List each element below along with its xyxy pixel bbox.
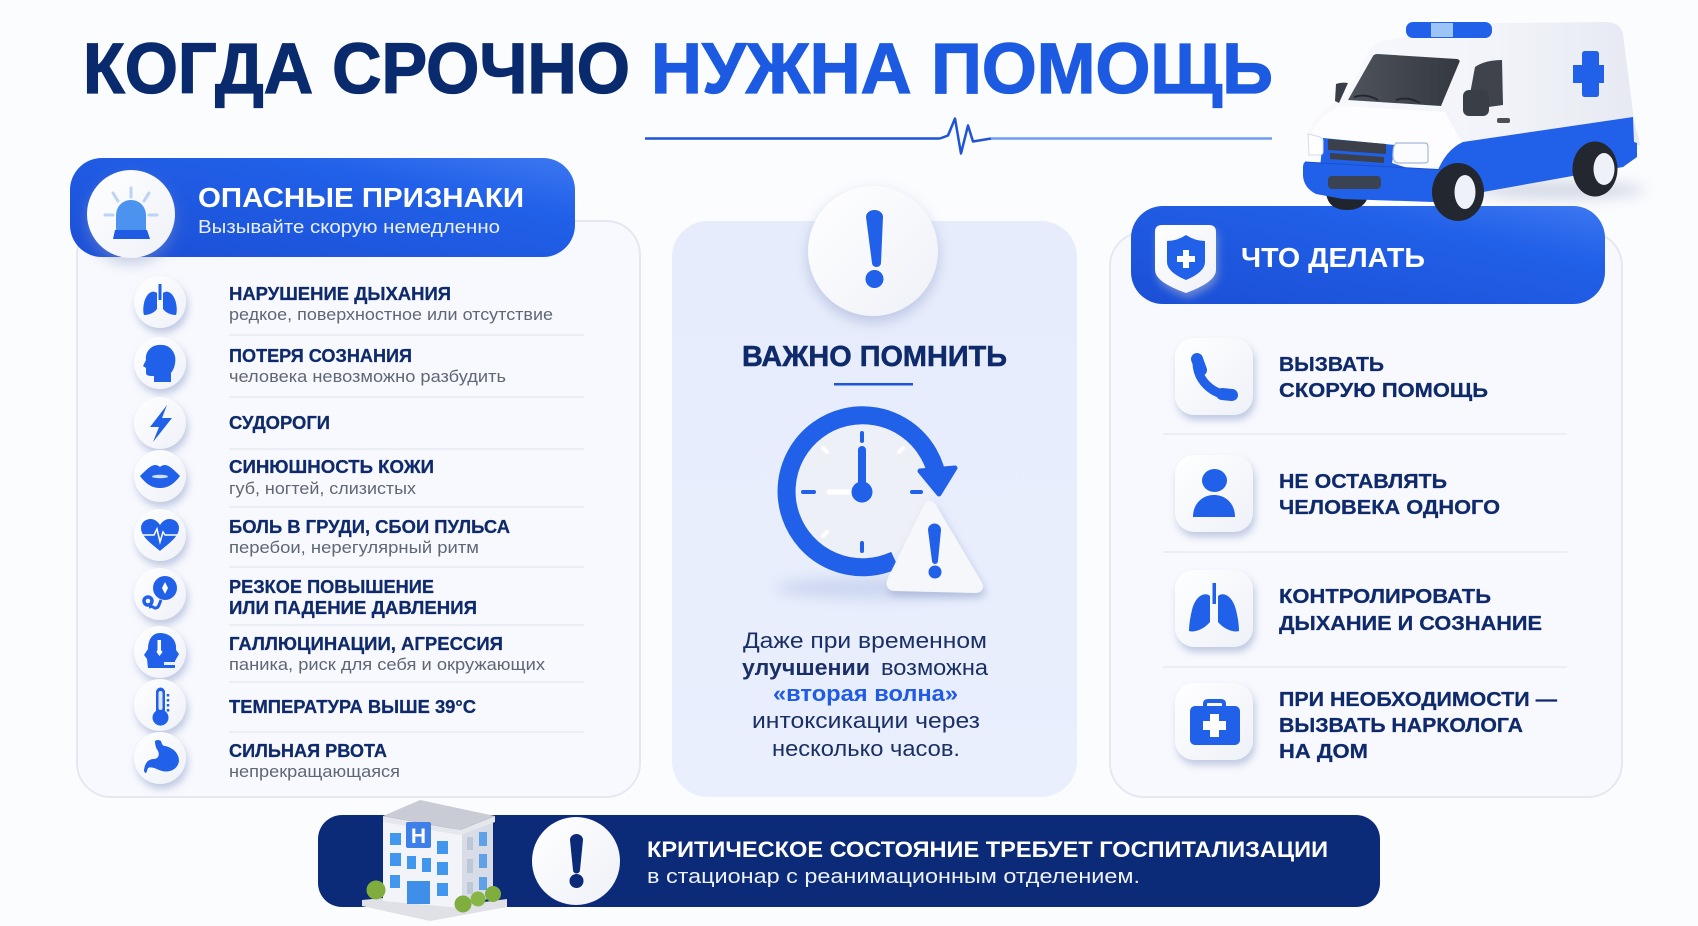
row: consciousness: ПОТЕРЯ СОЗНАНИЯ: [229, 346, 412, 366]
title: КОГДА СРОЧНО: [83, 30, 630, 109]
step: monitor breathing: [1175, 570, 1542, 647]
far front wheel: [1326, 193, 1369, 210]
front-right wheel: [1432, 163, 1484, 221]
step: call ambulance: СКОРУЮ ПОМОЩЬ: [1279, 380, 1488, 402]
headlights: [1393, 143, 1428, 163]
header pill: [70, 158, 575, 257]
row: breathing: редкое, поверхностное или отсутствие: [229, 306, 553, 324]
row: vomiting: [134, 732, 400, 784]
header pill: Вызывайте скорую немедленно: [198, 216, 500, 237]
door handle: [1497, 118, 1510, 123]
step: call narcologist: [1175, 683, 1557, 763]
hood highlight: [1312, 106, 1462, 170]
panel background: [77, 221, 640, 797]
title: НУЖНА ПОМОЩЬ: [651, 30, 1273, 109]
row: chest pain: [134, 509, 510, 561]
grille: [1328, 139, 1386, 163]
hospital sign: [406, 822, 431, 848]
left mirror: [1335, 83, 1348, 103]
step: call narcologist: ВЫЗВАТЬ НАРКОЛОГА: [1279, 715, 1523, 737]
icon: hospital building: H: [411, 825, 426, 848]
windows: [390, 833, 448, 896]
header pill: ЧТО ДЕЛАТЬ: [1241, 242, 1425, 273]
bushes: [366, 880, 386, 900]
row: seizures: [134, 397, 330, 449]
heartbeat divider: [645, 118, 1272, 154]
icon: siren: [87, 170, 175, 258]
blue grille surround: [1320, 138, 1420, 172]
header pill: [1131, 206, 1605, 304]
step: monitor breathing: ДЫХАНИЕ И СОЗНАНИЕ: [1279, 613, 1542, 635]
row: blood pressure: [134, 568, 477, 620]
panel: what to do: [1110, 206, 1622, 797]
row: seizures: СУДОРОГИ: [229, 413, 330, 433]
row: chest pain: перебои, нерегулярный ритм: [229, 539, 479, 557]
step: call narcologist: НА ДОМ: [1279, 741, 1368, 763]
door: [407, 881, 430, 904]
blue side panel: [1436, 117, 1637, 195]
bottom banner: в стационар с реанимационным отделением.: [647, 866, 1140, 888]
rear wheel: [1572, 142, 1618, 196]
text block: возможна: [881, 655, 989, 680]
icon: exclamation badge: [808, 186, 938, 316]
title: [83, 30, 1273, 109]
door mirror: [1463, 90, 1489, 116]
row: temperature: [134, 679, 476, 731]
text block: [742, 628, 989, 761]
text block: интоксикации через: [752, 708, 980, 733]
white body: [1308, 22, 1640, 175]
text block: улучшении: [742, 655, 870, 680]
row: cyanosis: губ, ногтей, слизистых: [229, 480, 417, 498]
icon: shield: [1155, 225, 1216, 293]
heading: ВАЖНО ПОМНИТЬ: [742, 341, 1007, 373]
row: blood pressure: РЕЗКОЕ ПОВЫШЕНИЕ: [229, 577, 434, 597]
bottom banner: [318, 815, 1380, 907]
step: do not leave alone: [1175, 455, 1500, 532]
step: monitor breathing: КОНТРОЛИРОВАТЬ: [1279, 586, 1491, 608]
panel: important to remember: [672, 186, 1077, 797]
windshield: [1348, 54, 1460, 106]
icon: clock with warning: [775, 415, 978, 599]
text block: Даже при временном: [743, 628, 987, 653]
step: call ambulance: ВЫЗВАТЬ: [1279, 354, 1384, 376]
text block: несколько часов.: [772, 736, 960, 761]
side window: [1467, 60, 1503, 110]
row: cyanosis: СИНЮШНОСТЬ КОЖИ: [229, 457, 434, 477]
row: hallucinations: паника, риск для себя и окружающих: [229, 656, 546, 674]
row: hallucinations: [134, 626, 546, 678]
row: consciousness: человека невозможно разбудить: [229, 368, 506, 386]
lower grille: [1328, 176, 1381, 189]
step: call ambulance: [1175, 338, 1488, 415]
icon: ambulance: [1303, 22, 1645, 221]
roof beacon: [1406, 22, 1492, 38]
row: temperature: ТЕМПЕРАТУРА ВЫШЕ 39°C: [229, 697, 476, 717]
row: chest pain: БОЛЬ В ГРУДИ, СБОИ ПУЛЬСА: [229, 517, 510, 537]
icon: hospital building: [362, 800, 507, 921]
row: breathing: [134, 276, 553, 328]
front bumper: [1303, 162, 1447, 202]
text block: «вторая волна»: [773, 681, 958, 706]
panel: dangerous signs: [70, 158, 640, 797]
bottom banner: КРИТИЧЕСКОЕ СОСТОЯНИЕ ТРЕБУЕТ ГОСПИТАЛИЗАЦИИ: [647, 837, 1328, 862]
base: [362, 898, 507, 921]
step: do not leave alone: НЕ ОСТАВЛЯТЬ: [1279, 471, 1447, 493]
row: cyanosis: [134, 450, 434, 502]
row: hallucinations: ГАЛЛЮЦИНАЦИИ, АГРЕССИЯ: [229, 634, 503, 654]
row: vomiting: непрекращающаяся: [229, 763, 400, 781]
row: consciousness: [134, 337, 506, 389]
row: vomiting: СИЛЬНАЯ РВОТА: [229, 741, 387, 761]
step: call narcologist: ПРИ НЕОБХОДИМОСТИ —: [1279, 689, 1557, 711]
front wall: [383, 820, 462, 908]
side wall: [462, 820, 493, 908]
header pill: ОПАСНЫЕ ПРИЗНАКИ: [198, 182, 524, 213]
icon: exclamation circle: [532, 817, 620, 905]
side cross: [1573, 51, 1604, 97]
roof: [383, 800, 495, 830]
row: breathing: НАРУШЕНИЕ ДЫХАНИЯ: [229, 284, 451, 304]
row: blood pressure: ИЛИ ПАДЕНИЕ ДАВЛЕНИЯ: [229, 598, 477, 618]
step: do not leave alone: ЧЕЛОВЕКА ОДНОГО: [1279, 497, 1500, 519]
